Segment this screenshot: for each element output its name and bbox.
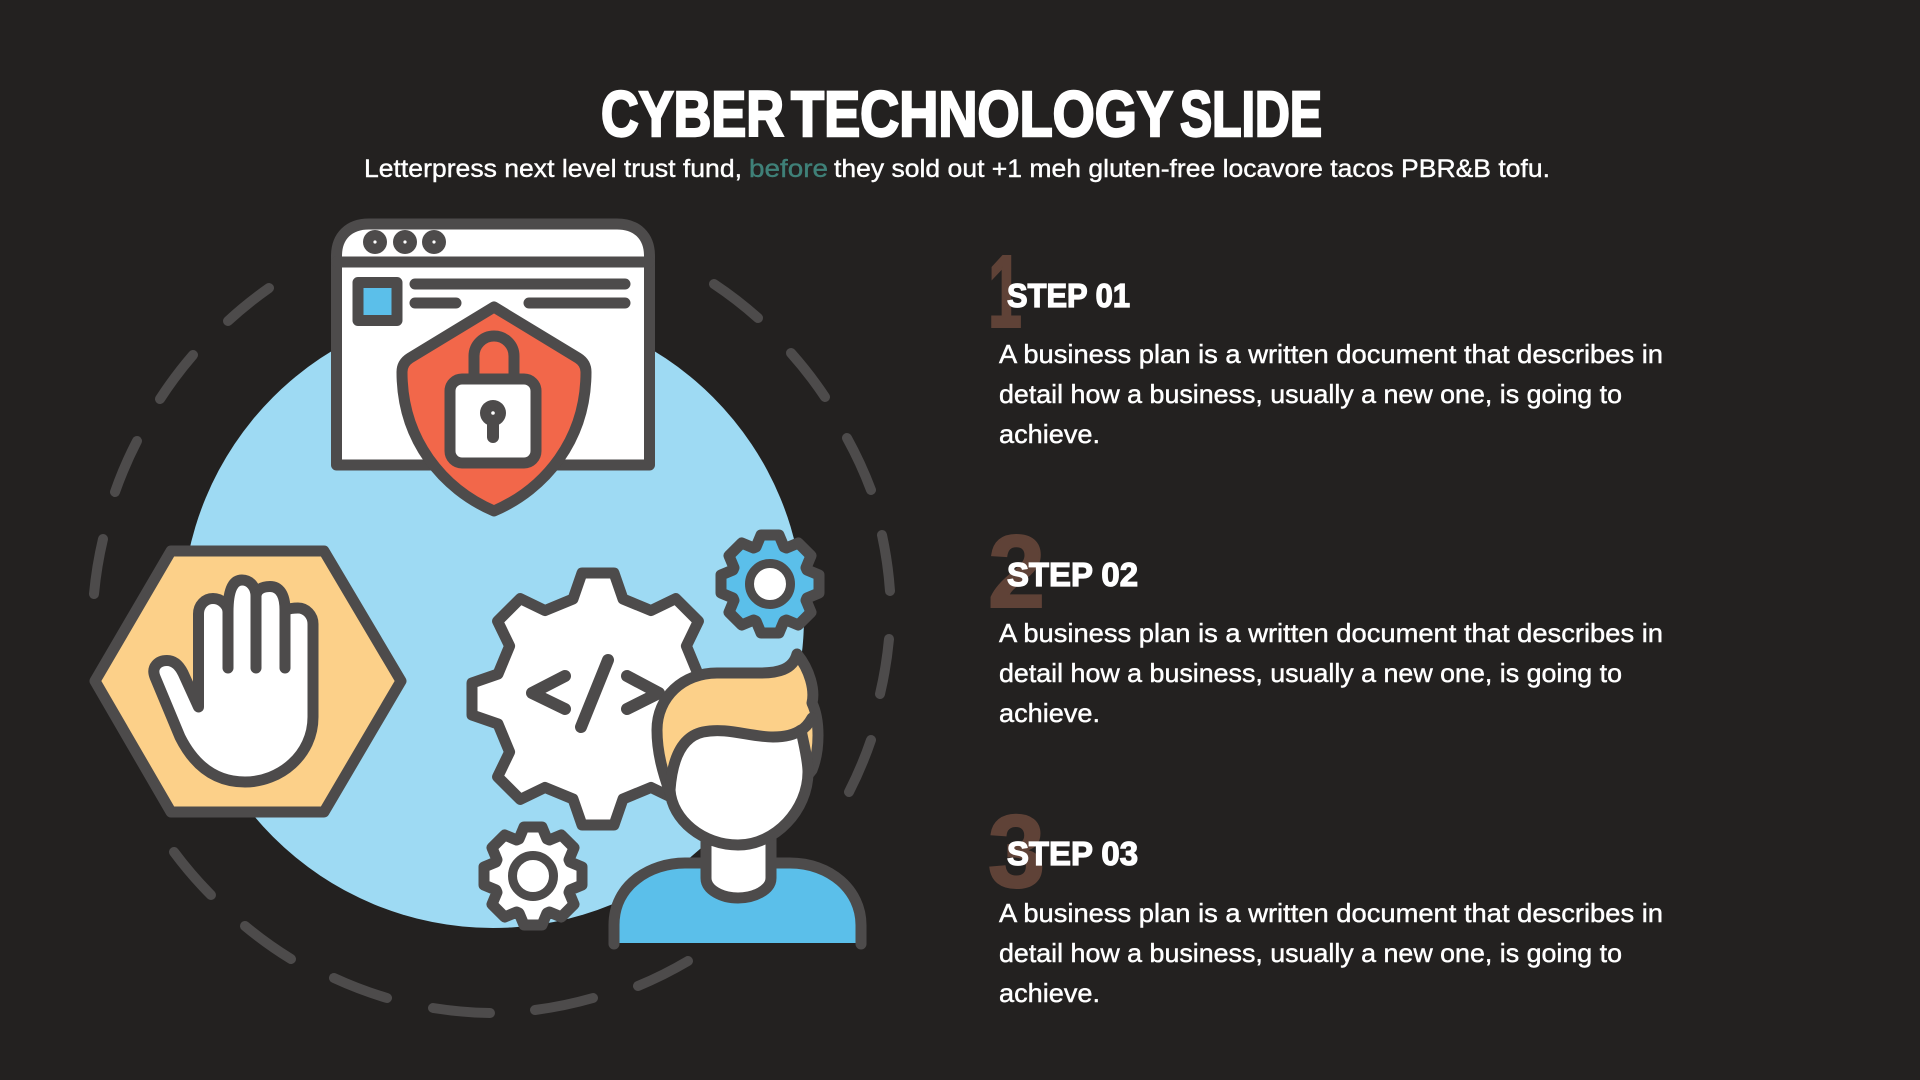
body text: [999, 339, 1663, 449]
heading: STEP 03: [1007, 835, 1138, 872]
numeral 1: 1: [988, 234, 1022, 349]
dashed ring: [94, 284, 890, 1013]
shield: [402, 307, 586, 511]
code symbol: [532, 660, 659, 727]
body text: detail how a business, usually a new one, is going to: [999, 658, 1622, 688]
icon: browser window with shield: [336, 224, 650, 511]
body text: achieve.: [999, 419, 1100, 449]
numeral 2: 2: [988, 514, 1045, 629]
title: TECHNOLOGY: [791, 78, 1173, 150]
subtitle: [364, 155, 1550, 183]
body text: A business plan is a written document that describes in: [999, 618, 1663, 648]
padlock: [450, 336, 536, 463]
hand: [154, 580, 313, 782]
body text: [999, 618, 1663, 728]
neck: [706, 830, 771, 898]
body text: A business plan is a written document that describes in: [999, 898, 1663, 928]
icon: small blue gear: [721, 535, 819, 633]
icon: small white gear: [484, 827, 582, 925]
title: SLIDE: [1180, 78, 1322, 150]
title: CYBER: [601, 78, 784, 150]
body text: A business plan is a written document that describes in: [999, 339, 1663, 369]
subtitle: they sold out +1 meh gluten-free locavore tacos PBR&B tofu.: [834, 155, 1550, 183]
browser window: [336, 224, 650, 465]
head: [670, 730, 808, 845]
body: [614, 863, 861, 943]
subtitle: before: [749, 155, 828, 183]
step 03: [988, 794, 1663, 1008]
hair: [657, 654, 818, 793]
subtitle: Letterpress next level trust fund,: [364, 155, 742, 183]
heading: STEP 02: [1007, 556, 1138, 593]
illustration: cyber security: [94, 224, 890, 1013]
numeral 3: 3: [988, 794, 1045, 909]
light blue circle: [182, 306, 804, 928]
icon: stop hand in hexagon: [95, 551, 401, 812]
icon: developer person: [614, 654, 861, 944]
heading: STEP 01: [1007, 277, 1130, 314]
body text: detail how a business, usually a new one, is going to: [999, 938, 1622, 968]
body text: [999, 898, 1663, 1008]
body text: detail how a business, usually a new one, is going to: [999, 379, 1622, 409]
finger lines: [228, 595, 285, 668]
body text: achieve.: [999, 978, 1100, 1008]
forelock edge: [800, 718, 812, 731]
shoulders outline: [614, 863, 861, 944]
hexagon: [95, 551, 401, 812]
step 01: [988, 234, 1663, 449]
icon: large code gear: [472, 573, 724, 825]
title: [601, 78, 1322, 150]
body text: achieve.: [999, 698, 1100, 728]
step 02: [988, 514, 1663, 728]
